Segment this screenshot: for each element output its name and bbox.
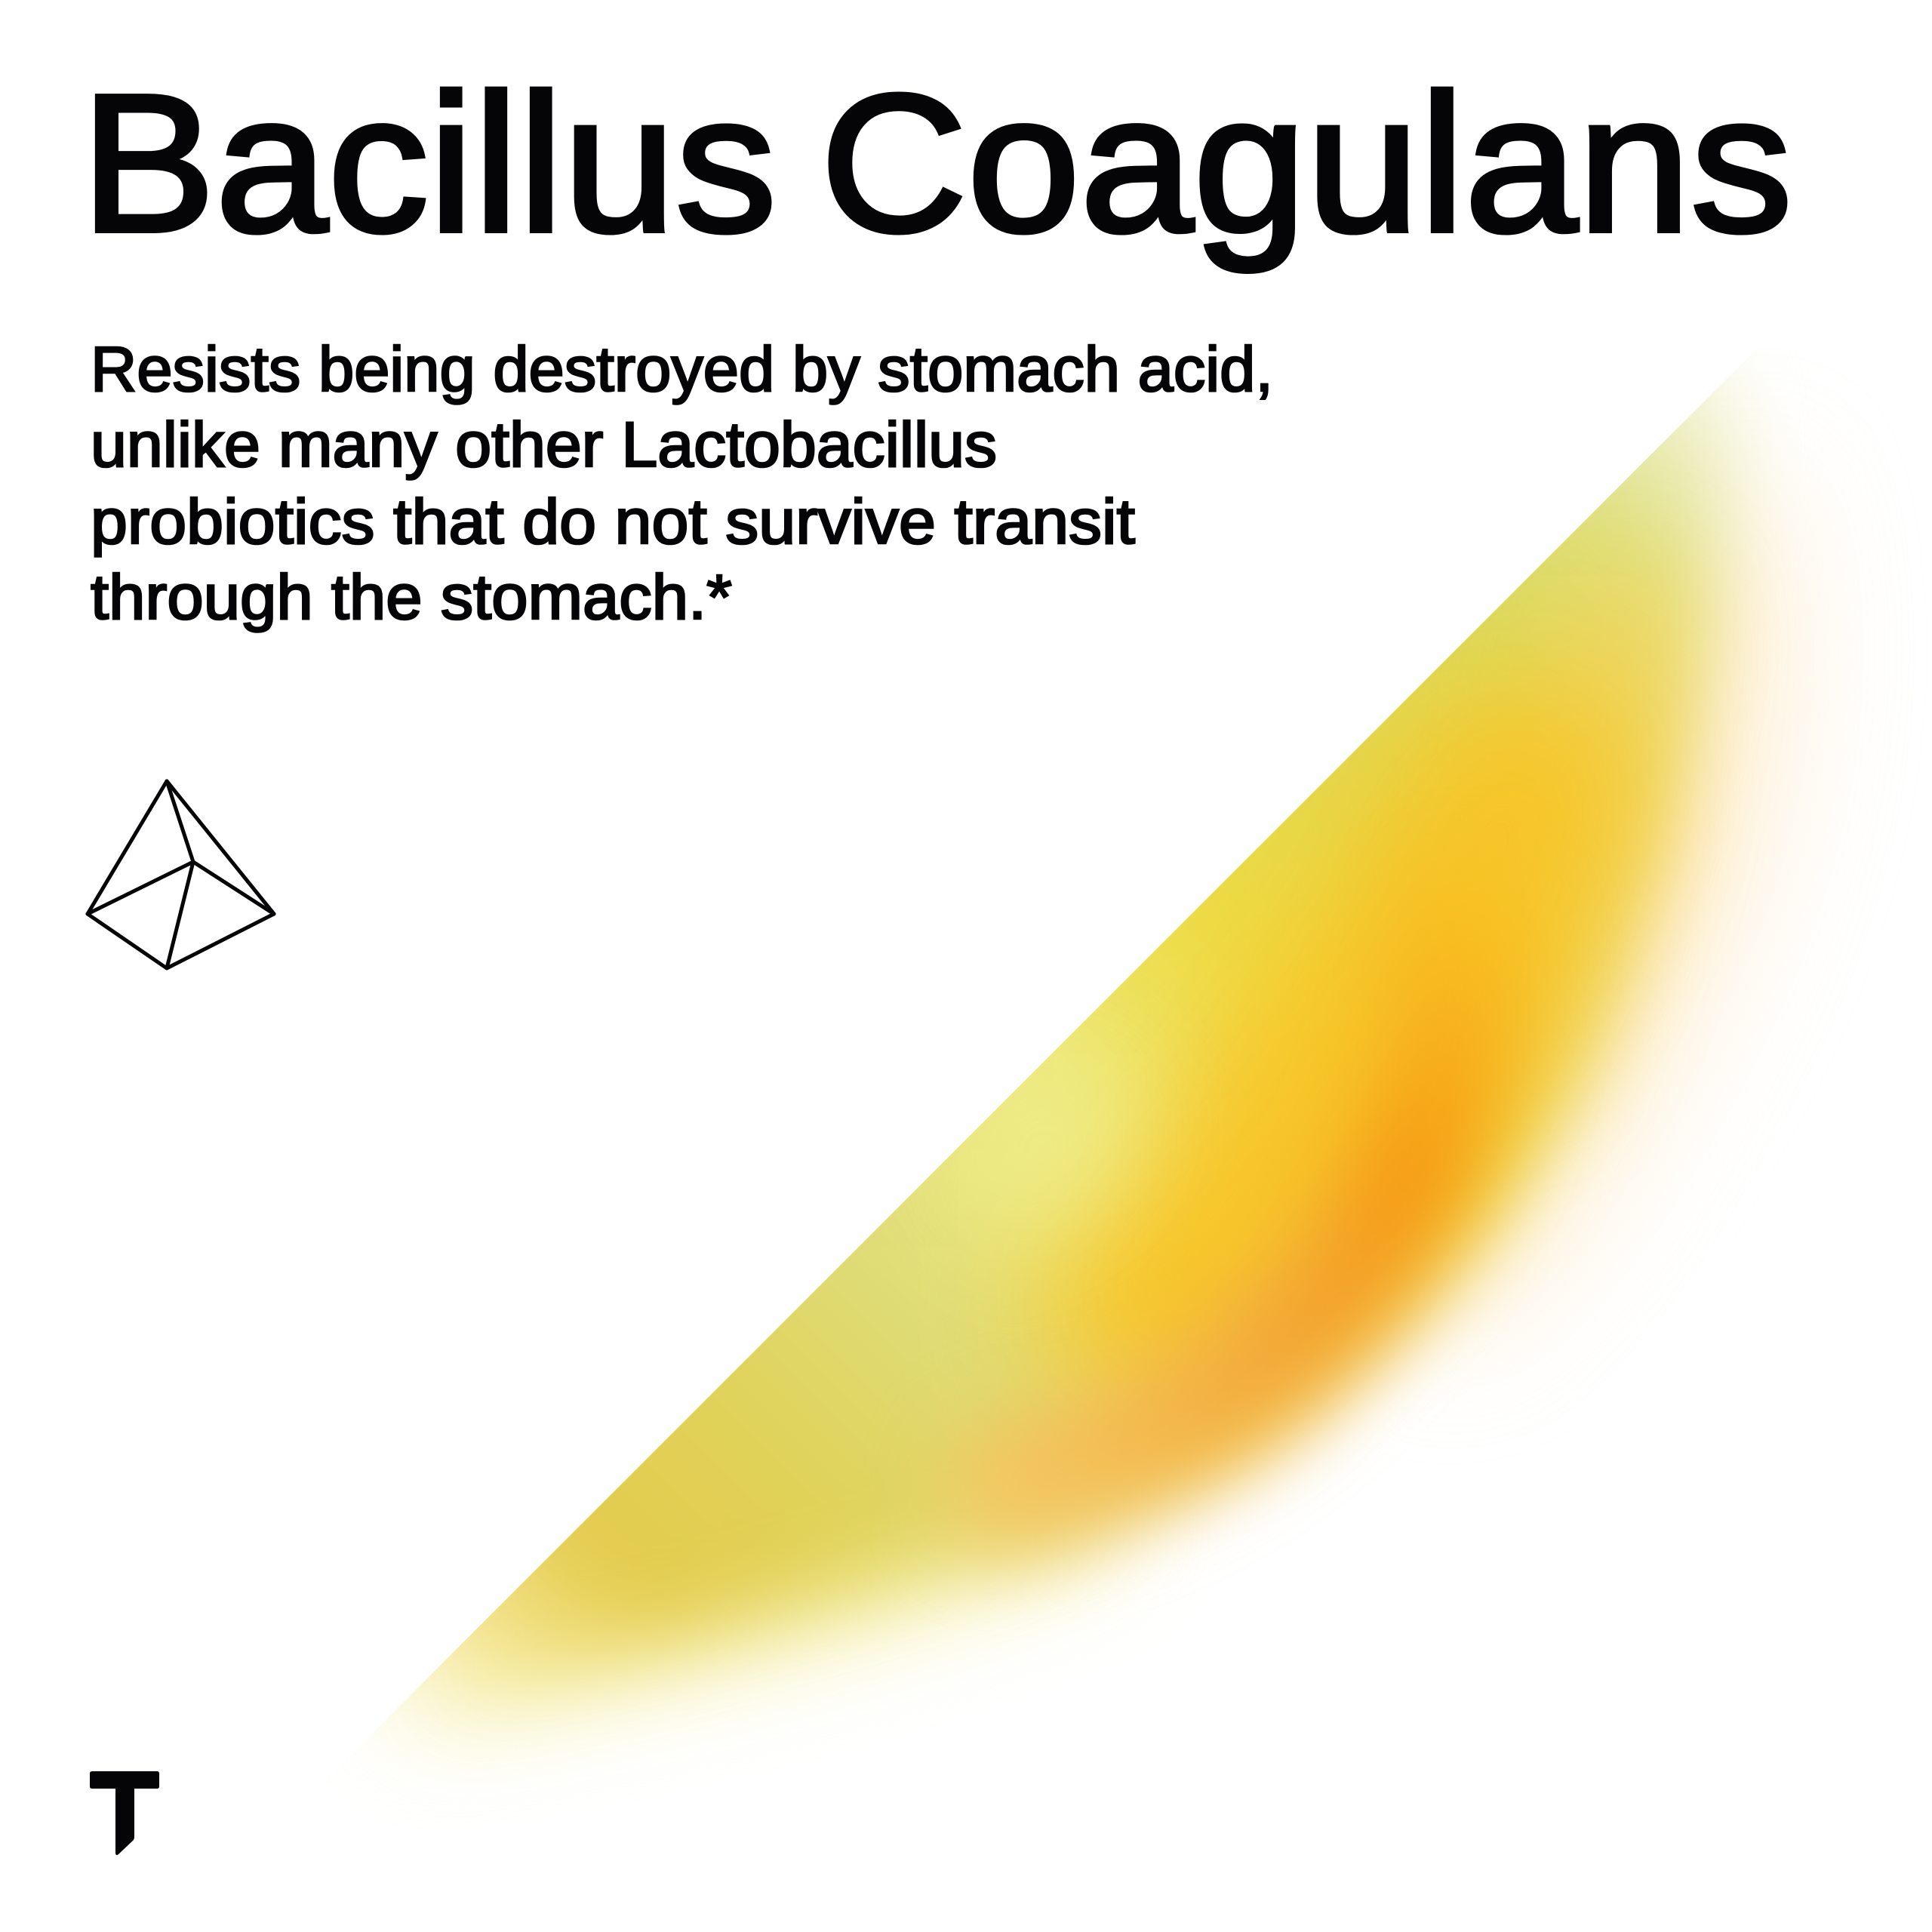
body text: probiotics that do not survive transit bbox=[91, 486, 1135, 557]
yellow base crescent bbox=[381, 362, 1774, 1733]
light amber upper band bbox=[1517, 626, 1623, 1041]
title: Bacillus bbox=[81, 54, 777, 273]
logo: T mark bbox=[90, 1771, 159, 1855]
title bbox=[81, 54, 1792, 274]
icon: wireframe pyramid bbox=[88, 781, 274, 968]
body text: through the stomach.* bbox=[91, 561, 732, 632]
golden band bbox=[1162, 800, 1517, 1298]
gradient glow shape bbox=[226, 302, 1796, 1728]
pale highlight bbox=[913, 1019, 1170, 1275]
title: Coagulans bbox=[820, 54, 1792, 274]
body text bbox=[91, 334, 1273, 632]
peach outer haze bbox=[1358, 453, 1796, 1358]
pale yellow lower fade bbox=[392, 1472, 1132, 1728]
orange core bbox=[1011, 936, 1472, 1487]
body text: Resists being destroyed by stomach acid, bbox=[91, 334, 1273, 405]
body text: unlike many other Lactobacillus bbox=[91, 409, 997, 480]
